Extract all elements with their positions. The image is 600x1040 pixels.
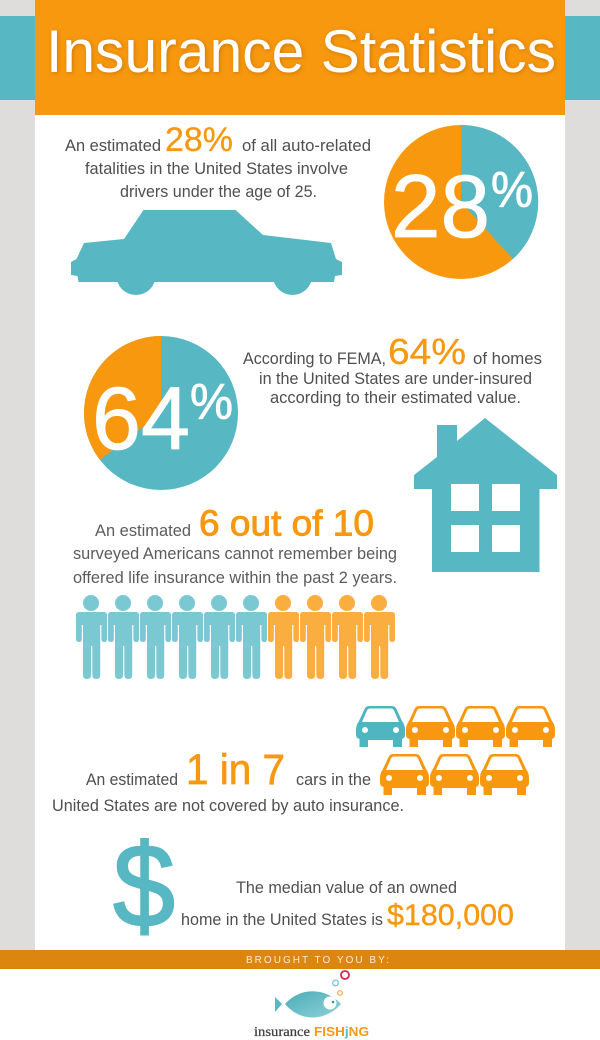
footer band bbox=[0, 950, 600, 969]
pie chart: 64 percent: % bbox=[190, 374, 233, 430]
text: 28 percent of fatalities: drivers under the age of 25. bbox=[120, 183, 317, 201]
panel: 64 percent statistic bbox=[84, 331, 557, 572]
icon: house bbox=[414, 418, 557, 572]
text: 6 out of 10 bbox=[73, 502, 397, 587]
pie chart: 28 percent: 28 bbox=[391, 156, 490, 256]
text: 64 percent of homes: in the United States are under-insured bbox=[259, 370, 532, 388]
text: 1 in 7 cars: United States are not covered by auto insurance. bbox=[52, 797, 404, 815]
panel: 6 out of 10 statistic bbox=[73, 502, 397, 679]
text: 1 in 7 cars: 1 in 7 bbox=[186, 746, 285, 794]
logo wordmark bbox=[254, 1024, 369, 1040]
text: median home value: The median value of an owned bbox=[236, 879, 457, 897]
text: 64 percent of homes: of homes bbox=[473, 350, 542, 368]
text: 1 in 7 cars: An estimated bbox=[86, 771, 178, 789]
text: 1 in 7 cars bbox=[52, 746, 404, 815]
text: 64 percent of homes: according to their estimated value. bbox=[270, 389, 521, 407]
panel: 1 in 7 statistic bbox=[52, 706, 555, 815]
icon group: seven cars bbox=[356, 706, 555, 795]
pie chart: 64 percent: 64 bbox=[92, 368, 190, 468]
text: 28 percent of fatalities: 28% bbox=[165, 121, 233, 159]
text: 28 percent of fatalities: An estimated bbox=[65, 137, 161, 155]
footer background bbox=[0, 969, 600, 1040]
logo wordmark: FISHjNG bbox=[314, 1024, 369, 1039]
text: 28 percent of fatalities bbox=[65, 121, 371, 201]
text: 1 in 7 cars: cars in the bbox=[296, 771, 371, 789]
title: Insurance Statistics bbox=[46, 18, 556, 85]
logo: insurance fishing bbox=[254, 971, 369, 1040]
text: 6 out of 10: surveyed Americans cannot remember being bbox=[73, 545, 397, 563]
icon: dollar sign: $ bbox=[113, 820, 175, 952]
footer band text: BROUGHT TO YOU BY: bbox=[246, 955, 389, 966]
text: 28 percent of fatalities: of all auto-related bbox=[242, 137, 371, 155]
text: 64 percent of homes bbox=[243, 331, 542, 407]
logo fish bbox=[275, 991, 341, 1018]
logo wordmark: insurance bbox=[254, 1025, 310, 1040]
text: 6 out of 10: offered life insurance within the past 2 years. bbox=[73, 569, 397, 587]
panel: 28 percent statistic bbox=[65, 121, 538, 295]
text: 64 percent of homes: According to FEMA, bbox=[243, 350, 386, 368]
icon row: ten people bbox=[76, 595, 395, 679]
pie chart: 64 percent bbox=[84, 336, 238, 490]
panel: median home value bbox=[113, 820, 514, 952]
icon: car side silhouette bbox=[71, 210, 342, 295]
text: 64 percent of homes: 64% bbox=[388, 331, 466, 372]
text: median home value: home in the United States is bbox=[181, 911, 383, 929]
text: 6 out of 10: 6 out of 10 bbox=[199, 502, 374, 544]
orange header banner bbox=[35, 0, 565, 115]
teal header ribbon bbox=[0, 16, 600, 100]
text: median home value: $180,000 bbox=[387, 899, 514, 932]
pie chart: 28 percent: % bbox=[491, 162, 533, 218]
text: 6 out of 10: An estimated bbox=[95, 522, 191, 540]
logo bubbles bbox=[333, 971, 349, 995]
pie chart: 28 percent bbox=[384, 125, 538, 279]
text: 28 percent of fatalities: fatalities in the United States involve bbox=[85, 160, 348, 178]
text: median home value bbox=[181, 879, 514, 932]
